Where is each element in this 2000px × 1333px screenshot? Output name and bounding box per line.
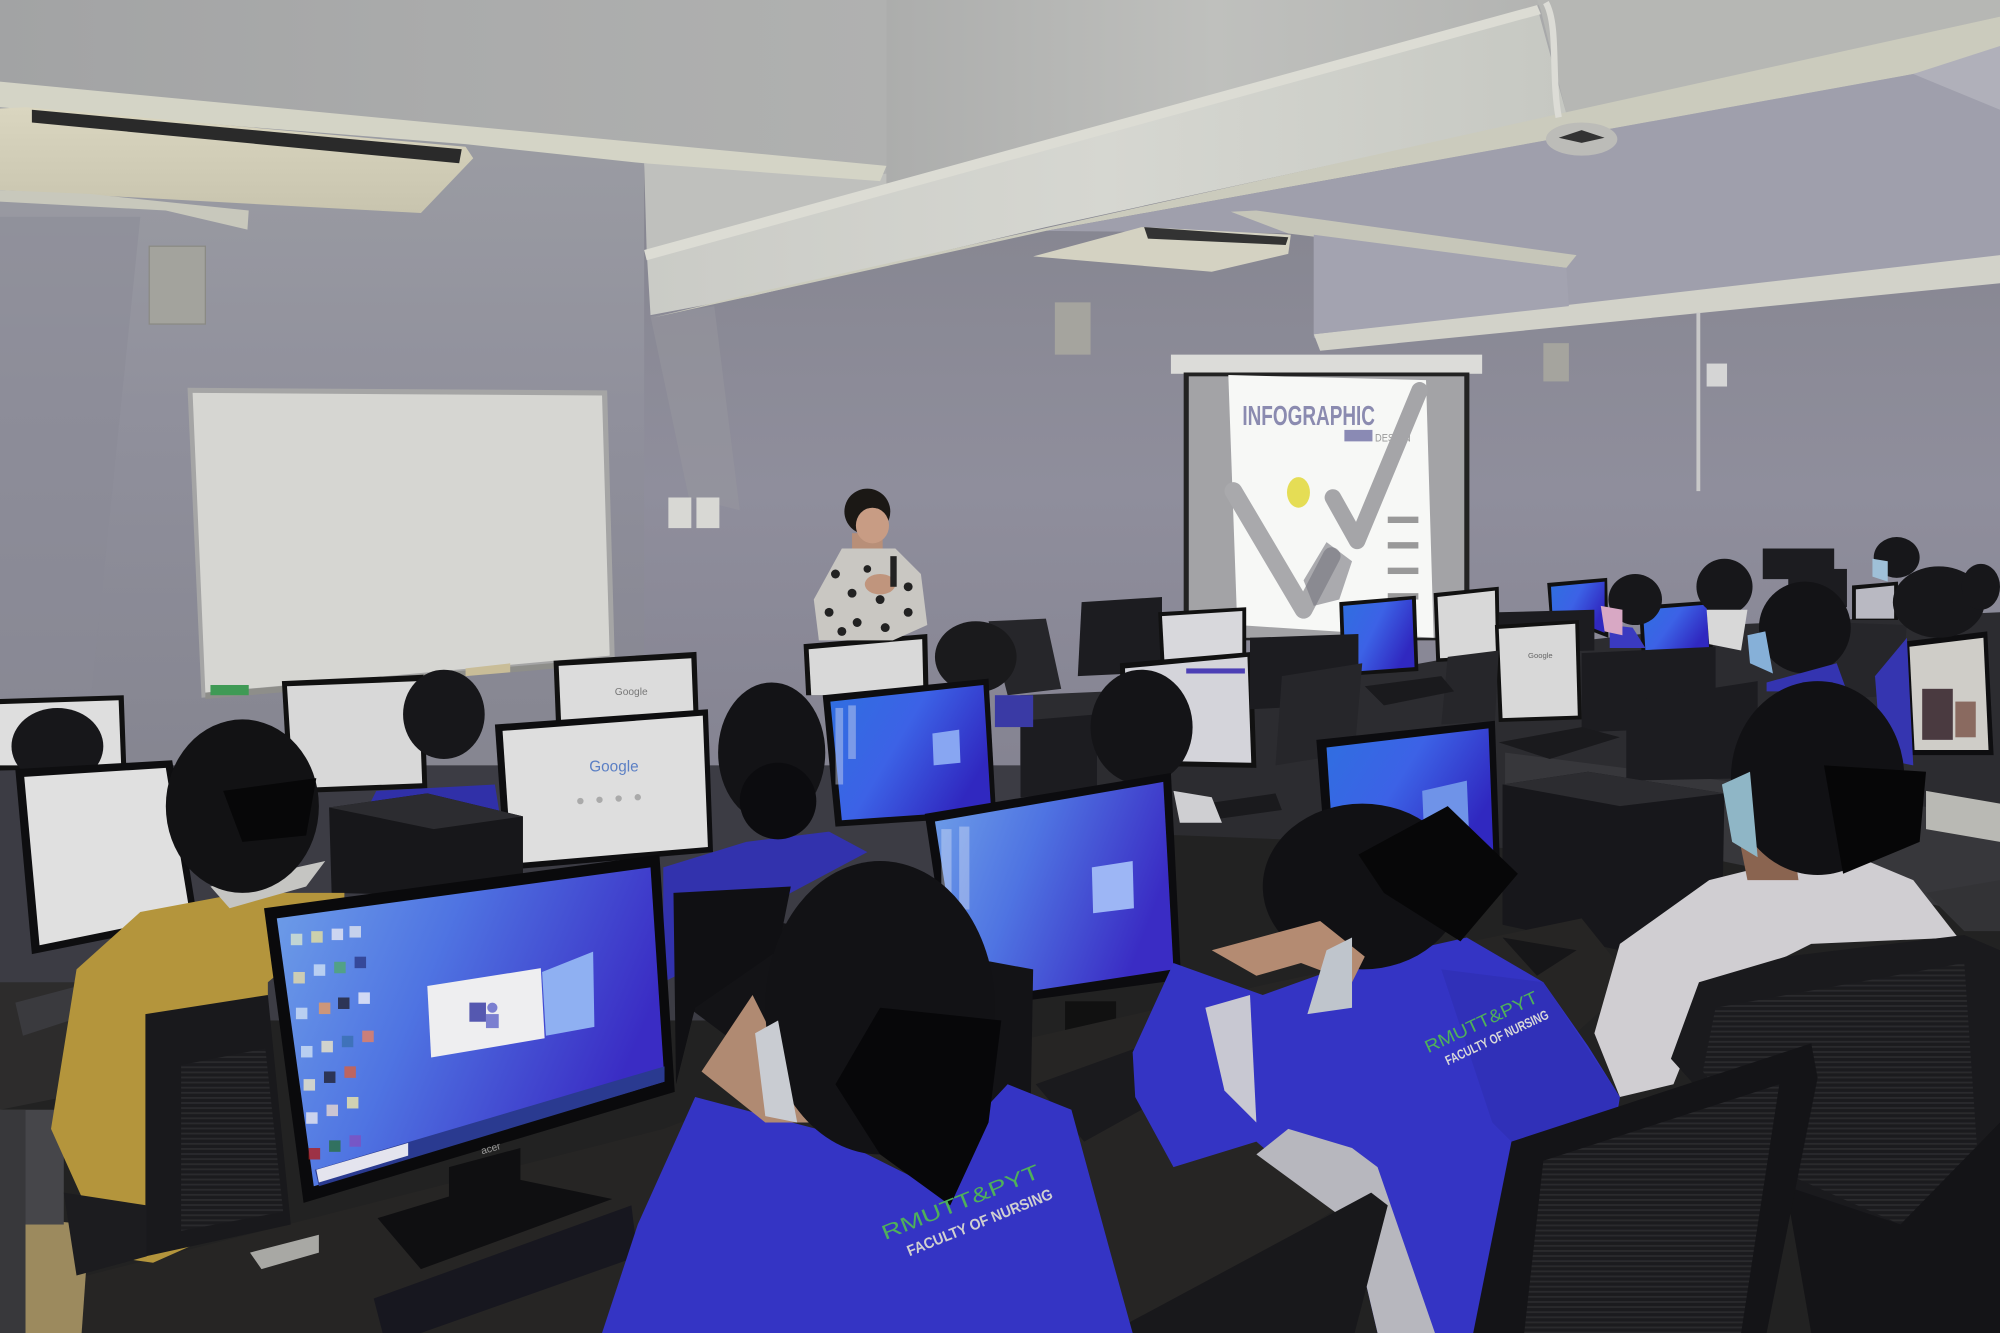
back-row monitors left [0,634,929,793]
monitor: blue right behind student [1316,721,1500,867]
computer tower right [1503,772,1724,950]
monitor: Google large [495,709,713,870]
back-row monitors right [1078,549,1898,768]
cable port on desk [250,1235,319,1269]
monitor: Google right: Google [1528,651,1553,660]
ceiling and beams [0,0,2000,351]
chair left [64,995,291,1276]
air conditioner centre [1033,227,1291,272]
monitor: Google right [1495,620,1582,722]
whiteboard [188,388,615,699]
chair foreground right [1473,1043,1818,1333]
student: back row left [357,670,500,829]
security camera [1696,313,1727,491]
projector screen: DESIGN [1375,432,1411,444]
floor left [0,1110,89,1333]
monitor: web page right [1904,631,1994,755]
wall thermostats [668,497,719,528]
keyboards [15,938,1577,1333]
speaker right [1543,343,1569,381]
student: centre with bun [663,682,867,982]
jacket text: FACULTY OF NURSING [905,1186,1055,1260]
jacket text: RMUTT&PYT [879,1161,1043,1245]
desktop icons [291,926,374,1159]
air conditioner left [0,107,473,230]
monitor: Google large: Google [589,759,639,776]
student: far left [11,708,103,784]
jacket text [879,1160,1055,1266]
student: hoodie right [1594,681,1958,1097]
monitor: front with Teams [264,855,675,1269]
slide title: INFOGRAPHIC [1242,400,1375,431]
speaker left [149,246,205,324]
student: leaning in blue jacket [1133,804,1620,1333]
back wall [0,0,2000,816]
presenter [814,489,927,640]
projector screen [1171,355,1482,640]
monitor brand: acer [480,1141,503,1157]
monitor: blue centre-back [823,679,996,827]
student: yellow sweater [51,719,344,1263]
chair foreground centre [1110,1193,1388,1333]
jacket text: RMUTT&PYT [1421,987,1541,1057]
monitor: white left [15,760,198,954]
empty chairs back [989,619,1907,765]
back-row monitors left: Google [615,687,648,698]
main desk surfaces [0,880,2000,1333]
icon: Teams logo [469,1003,499,1028]
computer towers left [329,793,523,895]
jacket text: FACULTY OF NURSING [1443,1007,1551,1068]
jacket text [1421,986,1551,1073]
back desks and right dark area [0,612,2000,1020]
slide checkmark [1233,491,1332,610]
taskbar [315,1066,665,1186]
tower centre [673,887,1033,1110]
chair right [1671,935,2000,1333]
back computer towers [1020,610,1758,797]
right-rear students [1601,537,2000,765]
ceiling projector [1546,122,1617,156]
speaker centre [1055,302,1091,355]
student: front centre [602,861,1133,1333]
student: centre back 2 [1091,670,1222,823]
back desk surfaces with keyboards [1205,676,1620,819]
monitor: blue centre large [925,773,1181,1059]
student behind presenter [935,621,1033,727]
